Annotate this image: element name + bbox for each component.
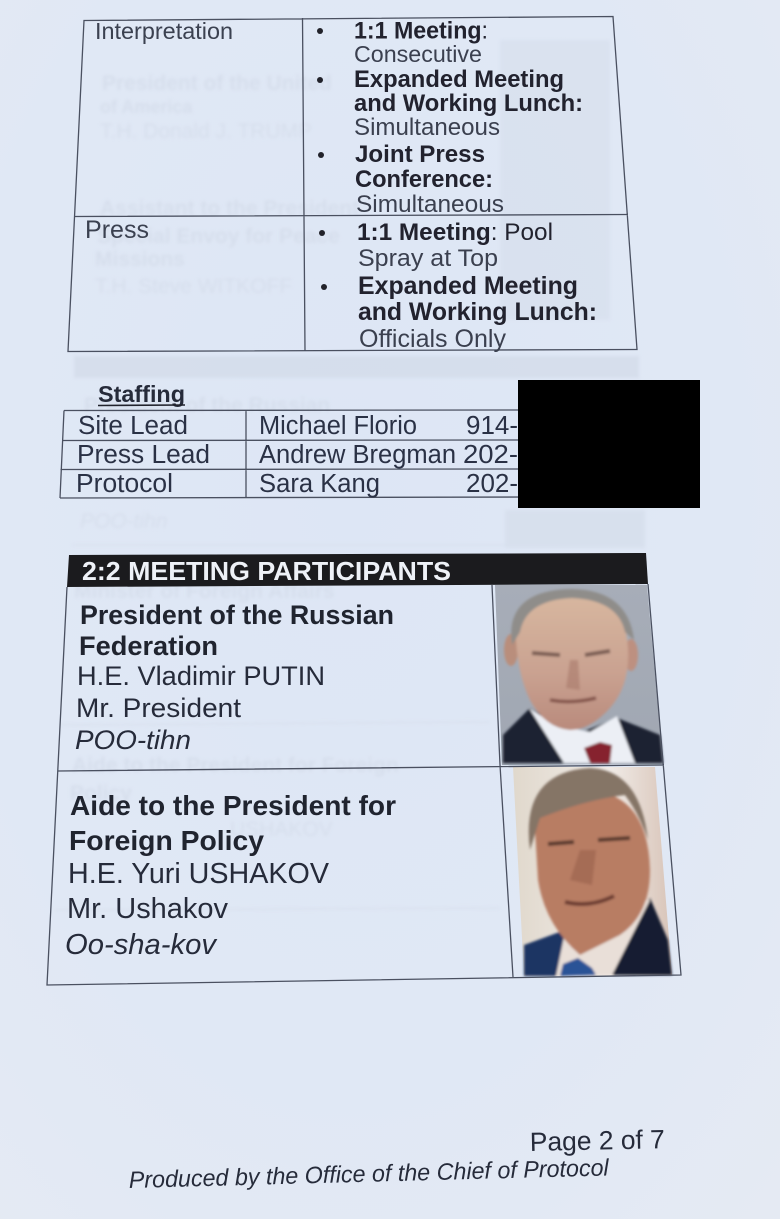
portrait 1 — [495, 585, 663, 765]
row: site lead — [78, 412, 518, 440]
redaction block — [518, 380, 700, 508]
show-through text from reverse page: Assistant to the President — [100, 197, 359, 220]
participant: Putin: Mr. President — [76, 693, 242, 723]
interpretation list: Consecutive — [354, 41, 482, 67]
participant: Putin: POO-tihn — [75, 725, 191, 755]
interpretation list: 1:1 Meeting: — [354, 18, 488, 44]
row: site lead: Michael Florio — [259, 412, 417, 440]
press list: and Working Lunch: — [358, 299, 597, 326]
row: site lead: Site Lead — [78, 412, 188, 440]
row: site lead: 914- — [466, 412, 518, 440]
staffing table — [60, 410, 530, 498]
table grid — [68, 16, 637, 352]
press list — [319, 219, 597, 353]
page number: Page 2 of 7 — [529, 1124, 665, 1157]
row: protocol: Protocol — [76, 470, 173, 498]
row: press lead: 202- — [463, 441, 518, 469]
show-through text from reverse page: USHAKOV — [230, 818, 333, 841]
show-through text from reverse page: President of the United — [102, 72, 332, 95]
show-through text from reverse page: Missions — [95, 248, 185, 271]
show-through text from reverse page: T.H. Donald J. TRUMP — [100, 120, 312, 143]
press list: Spray at Top — [358, 245, 498, 272]
row: protocol — [76, 470, 518, 498]
participants table — [47, 553, 681, 985]
show-through text from reverse page: Special Envoy for Peace — [97, 225, 340, 248]
row: protocol: 202- — [466, 470, 518, 498]
interpretation list: Simultaneous — [354, 114, 500, 141]
interpretation list: Simultaneous — [356, 191, 504, 218]
press list: Expanded Meeting — [358, 273, 578, 300]
row: press lead — [77, 441, 518, 469]
interpretation list — [317, 18, 583, 218]
interpretation list: Expanded Meeting — [354, 67, 564, 93]
row: press lead: Andrew Bregman — [259, 441, 456, 469]
show-through text from reverse page: Minister of Foreign Affairs — [74, 580, 335, 603]
staffing heading: Staffing — [98, 381, 185, 407]
portrait 2 — [513, 767, 672, 976]
show-through text from reverse page: of America — [100, 97, 193, 117]
participant: Putin: President of the Russian — [80, 600, 394, 630]
press list: Officials Only — [359, 325, 506, 353]
show-through text from reverse page — [55, 40, 645, 910]
row label: Interpretation: Interpretation — [95, 18, 233, 44]
interpretation list: Joint Press — [355, 141, 485, 168]
show-through text from reverse page: Policy — [70, 782, 132, 805]
staffing grid — [60, 410, 530, 498]
participant: Ushakov: Foreign Policy — [69, 825, 264, 856]
header band: 2:2 MEETING PARTICIPANTS — [82, 556, 451, 586]
row label: Press: Press — [85, 216, 149, 244]
press list: 1:1 Meeting: Pool — [357, 219, 553, 246]
participant: Putin: Federation — [79, 631, 218, 661]
row: press lead: Press Lead — [77, 441, 210, 469]
participant: Ushakov: Aide to the President for — [70, 790, 396, 821]
header band — [67, 553, 648, 587]
interpretation list: Conference: — [355, 167, 493, 193]
participant: Ushakov: H.E. Yuri USHAKOV — [68, 858, 329, 890]
footer credit: Produced by the Office of the Chief of Protocol — [128, 1155, 610, 1194]
participant: Putin: H.E. Vladimir PUTIN — [77, 661, 325, 691]
participant: Ushakov: Mr. Ushakov — [67, 893, 229, 925]
participants grid — [47, 584, 681, 985]
row: protocol: Sara Kang — [259, 470, 380, 498]
interpretation list: and Working Lunch: — [354, 91, 583, 117]
participant: Putin — [75, 600, 394, 755]
participant: Ushakov — [65, 790, 396, 961]
show-through text from reverse page: POO-tihn — [80, 510, 168, 533]
participant: Ushakov: Oo-sha-kov — [65, 929, 218, 961]
table: interpretation and press logistics — [68, 16, 637, 353]
show-through text from reverse page: Aide to the President for Foreign — [72, 754, 399, 777]
show-through text from reverse page: President of the Russian — [84, 394, 330, 417]
show-through text from reverse page: T.H. Steve WITKOFF — [95, 275, 292, 298]
